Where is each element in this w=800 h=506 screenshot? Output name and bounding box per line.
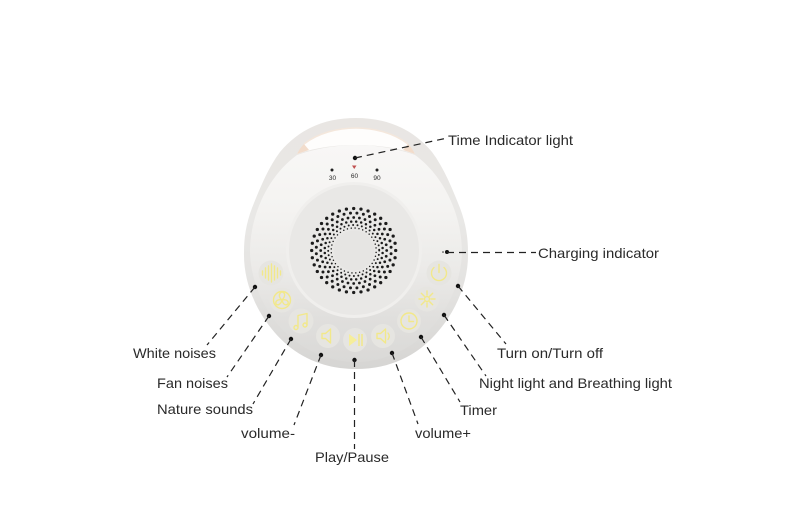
icon: white noise	[258, 260, 284, 286]
front face	[250, 145, 462, 362]
icon: power	[426, 260, 452, 286]
time markers	[329, 166, 381, 182]
speaker holes	[312, 208, 396, 292]
callout: turn on turn off	[456, 284, 603, 361]
callout: charging indicator: Charging indicator	[538, 245, 659, 261]
icon: volume up	[371, 324, 395, 348]
callout: volume minus	[241, 353, 323, 441]
callout: night light and breathing light: Night light and Breathing light	[479, 375, 672, 391]
time markers: 60	[351, 173, 358, 180]
callout: fan noises: Fan noises	[157, 375, 228, 391]
icon: volume down	[316, 324, 340, 348]
callout: white noises: White noises	[133, 345, 216, 361]
callout: volume minus: volume-	[241, 425, 295, 441]
callout: time indicator light	[353, 132, 573, 160]
handle window	[297, 128, 415, 154]
callout: play pause: Play/Pause	[315, 449, 389, 465]
icon: play pause	[343, 328, 367, 352]
icon: music note	[288, 308, 314, 334]
speaker disc	[286, 182, 422, 318]
callout: nature sounds	[157, 337, 293, 417]
body shell with handle	[244, 118, 468, 369]
callout: charging indicator	[442, 245, 659, 261]
callout: play pause	[315, 358, 389, 465]
icon: fan	[270, 288, 294, 312]
product: sound machine	[244, 118, 468, 369]
callout: nature sounds: Nature sounds	[157, 401, 253, 417]
callout: turn on turn off: Turn on/Turn off	[497, 345, 603, 361]
callout: white noises	[133, 285, 257, 361]
icon: timer clock	[397, 309, 421, 333]
callout: timer	[419, 335, 497, 418]
callout: volume plus: volume+	[415, 425, 471, 441]
callout: night light and breathing light	[442, 313, 672, 391]
time markers: 90	[373, 175, 381, 182]
time markers: 30	[329, 175, 336, 182]
callout: time indicator light: Time Indicator light	[448, 132, 573, 148]
icon: sun light	[414, 286, 440, 312]
callout: timer: Timer	[460, 402, 497, 418]
callout: volume plus	[390, 351, 471, 441]
callout: fan noises	[157, 314, 271, 391]
